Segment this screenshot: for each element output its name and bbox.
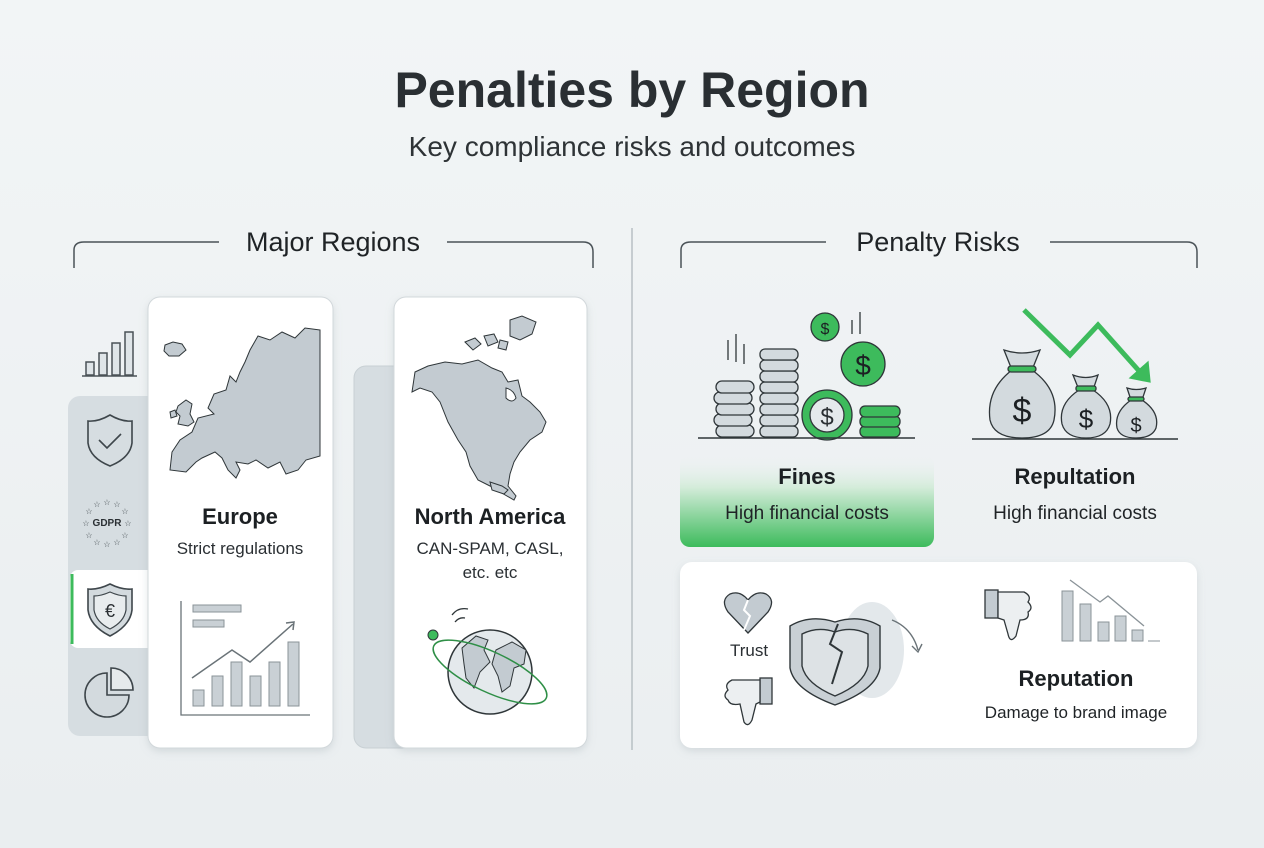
icon: broken heart	[724, 593, 772, 633]
highlight: Fines: High financial costs	[725, 503, 889, 524]
icon: GDPR: ☆	[124, 519, 132, 528]
label: Reputation top: Repultation	[1014, 464, 1136, 489]
icon: coins: $	[855, 350, 871, 381]
panel: sidebar	[68, 396, 168, 736]
icon: GDPR: ☆	[85, 507, 93, 516]
icon: GDPR: ☆	[103, 498, 111, 507]
icon: GDPR: GDPR	[93, 518, 122, 529]
icon: pie chart	[85, 668, 133, 717]
subtitle: Key compliance risks and outcomes	[409, 131, 855, 162]
map: Europe	[164, 328, 320, 478]
heading: Major Regions: Major Regions	[246, 227, 420, 257]
label: Europe: Strict regulations	[177, 539, 303, 558]
label: North America: CAN-SPAM, CASL,	[416, 539, 564, 558]
icon: money bags with down arrow	[972, 310, 1178, 439]
icon: GDPR: ☆	[113, 500, 121, 509]
icon: GDPR: ☆	[82, 519, 90, 528]
icon: bar chart	[82, 332, 137, 376]
icon: GDPR: ☆	[93, 538, 101, 547]
map: North America	[412, 316, 546, 500]
label: Europe: Europe	[202, 504, 278, 529]
label: North America: etc. etc	[463, 563, 518, 582]
icon: GDPR: ☆	[113, 538, 121, 547]
icon: money bags with down arrow: $	[1079, 404, 1094, 434]
card: Europe	[148, 297, 333, 748]
label: Trust: Trust	[730, 641, 768, 660]
label: Reputation top	[993, 464, 1157, 524]
icon: GDPR	[82, 498, 132, 549]
title: Penalties by Region	[394, 62, 870, 118]
label: North America: North America	[415, 504, 566, 529]
icon: coins: $	[821, 321, 830, 338]
highlight: Fines	[680, 455, 934, 547]
icon: thumbs down large	[985, 590, 1031, 640]
label: North America	[415, 504, 566, 582]
icon: money bags with down arrow: $	[1013, 392, 1032, 430]
heading: Penalty Risks	[681, 227, 1197, 268]
icon: globe	[425, 609, 555, 716]
icon: coins	[698, 312, 915, 440]
label: Europe	[177, 504, 303, 558]
label: Reputation bottom: Damage to brand image	[985, 703, 1167, 722]
icon: GDPR: ☆	[85, 531, 93, 540]
label: Reputation bottom: Reputation	[1019, 666, 1133, 691]
panel: back plate	[354, 366, 414, 748]
icon: GDPR: ☆	[93, 500, 101, 509]
chart: growth bars	[181, 601, 310, 715]
icon: GDPR: ☆	[121, 531, 129, 540]
icon: GDPR: ☆	[103, 540, 111, 549]
icon: cracked shield	[790, 602, 922, 705]
label: Reputation bottom	[985, 666, 1167, 722]
heading: Major Regions	[74, 227, 593, 268]
heading: Penalty Risks: Penalty Risks	[856, 227, 1020, 257]
card: North America	[394, 297, 587, 748]
card: Reputation damage	[680, 562, 1197, 748]
chart: declining bars	[1062, 580, 1160, 641]
icon: thumbs down small	[725, 678, 772, 725]
tab: active euro shield	[70, 570, 168, 648]
highlight: Fines: Fines	[778, 464, 836, 489]
icon: GDPR: ☆	[121, 507, 129, 516]
icon: coins: $	[820, 404, 834, 431]
tab: active euro shield: €	[105, 601, 115, 621]
icon: money bags with down arrow: $	[1130, 415, 1142, 437]
icon: shield check	[88, 415, 132, 466]
label: Reputation top: High financial costs	[993, 503, 1157, 524]
